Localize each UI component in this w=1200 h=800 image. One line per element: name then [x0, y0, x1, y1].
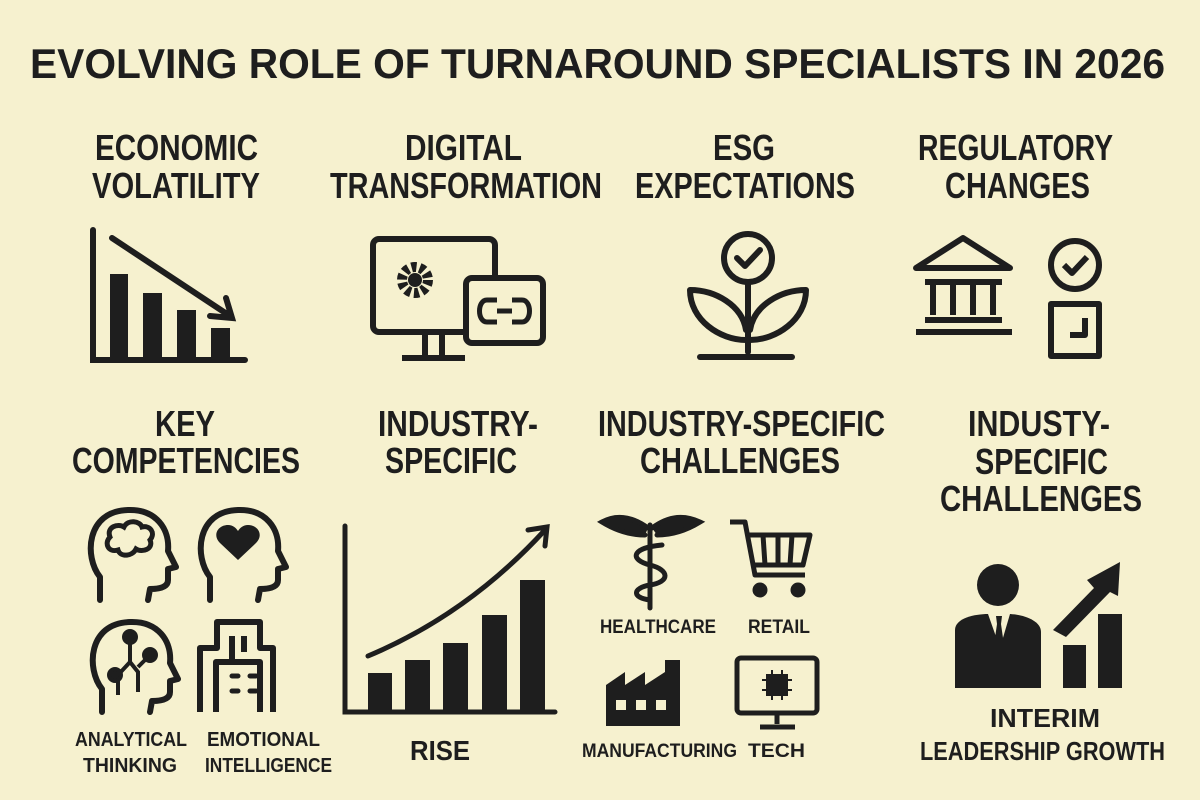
heading: regulatory changes	[918, 127, 1113, 206]
title: EVOLVING ROLE OF TURNAROUND SPECIALISTS IN 2026	[30, 40, 1165, 87]
heading: digital transformation: TRANSFORMATION	[330, 165, 602, 206]
heading: industy-specific challenges: INDUSTY-	[968, 403, 1110, 444]
heading: industry-specific challenges	[598, 403, 885, 481]
heading: key competencies: KEY	[155, 403, 215, 444]
icon: bank and checklist	[916, 238, 1099, 356]
heading: industy-specific challenges	[940, 403, 1142, 519]
heading: key competencies: COMPETENCIES	[72, 440, 300, 481]
label: analytical thinking: THINKING	[83, 755, 177, 777]
heading: industry-specific	[378, 403, 538, 481]
label: healthcare: HEALTHCARE	[600, 617, 716, 638]
heading: industry-specific: INDUSTRY-	[378, 403, 538, 444]
heading: industry-specific challenges: CHALLENGES	[640, 440, 840, 481]
icon: head with circuit	[93, 622, 178, 712]
label: rise: RISE	[410, 735, 470, 766]
heading: esg expectations: ESG	[713, 127, 775, 168]
label: retail: RETAIL	[748, 617, 810, 638]
heading: industry-specific: SPECIFIC	[385, 440, 517, 481]
heading: regulatory changes: CHANGES	[945, 165, 1090, 206]
heading: economic volatility	[92, 127, 260, 206]
label: interim leadership growth	[920, 703, 1165, 766]
heading: digital transformation: DIGITAL	[405, 127, 522, 168]
heading: economic volatility: VOLATILITY	[92, 165, 260, 206]
icon: head with brain	[91, 510, 176, 600]
icon: factory	[606, 660, 680, 726]
icon: caduceus	[602, 517, 700, 608]
label: emotional intelligence: INTELLIGENCE	[205, 755, 332, 777]
heading: economic volatility: ECONOMIC	[95, 127, 258, 168]
icon: head with heart	[201, 510, 286, 600]
heading: esg expectations: EXPECTATIONS	[635, 165, 855, 206]
icon: building	[200, 622, 273, 712]
icon: monitor with gear and link	[373, 239, 543, 358]
chart: rise bar chart	[345, 526, 555, 712]
icons: competency heads	[91, 510, 286, 712]
icon: declining bar chart	[93, 230, 245, 360]
label: interim leadership growth: INTERIM	[990, 703, 1100, 733]
label: analytical thinking: ANALYTICAL	[75, 729, 187, 751]
icon: plant with check	[690, 234, 806, 357]
heading: industy-specific challenges: CHALLENGES	[940, 478, 1142, 519]
heading: key competencies	[72, 403, 300, 481]
heading: regulatory changes: REGULATORY	[918, 127, 1113, 168]
label: emotional intelligence	[205, 729, 332, 777]
icon: leader with growth chart	[955, 562, 1122, 688]
heading: industry-specific challenges: INDUSTRY-SPECIFIC	[598, 403, 885, 444]
label: emotional intelligence: EMOTIONAL	[207, 729, 320, 751]
icon: tech monitor	[737, 658, 817, 727]
label: analytical thinking	[75, 729, 187, 777]
icon: cart	[730, 522, 810, 595]
label: tech: TECH	[748, 741, 805, 762]
label: manufacturing: MANUFACTURING	[582, 741, 737, 762]
heading: esg expectations	[635, 127, 855, 206]
heading: industy-specific challenges: SPECIFIC	[975, 441, 1108, 482]
heading: digital transformation	[330, 127, 602, 206]
